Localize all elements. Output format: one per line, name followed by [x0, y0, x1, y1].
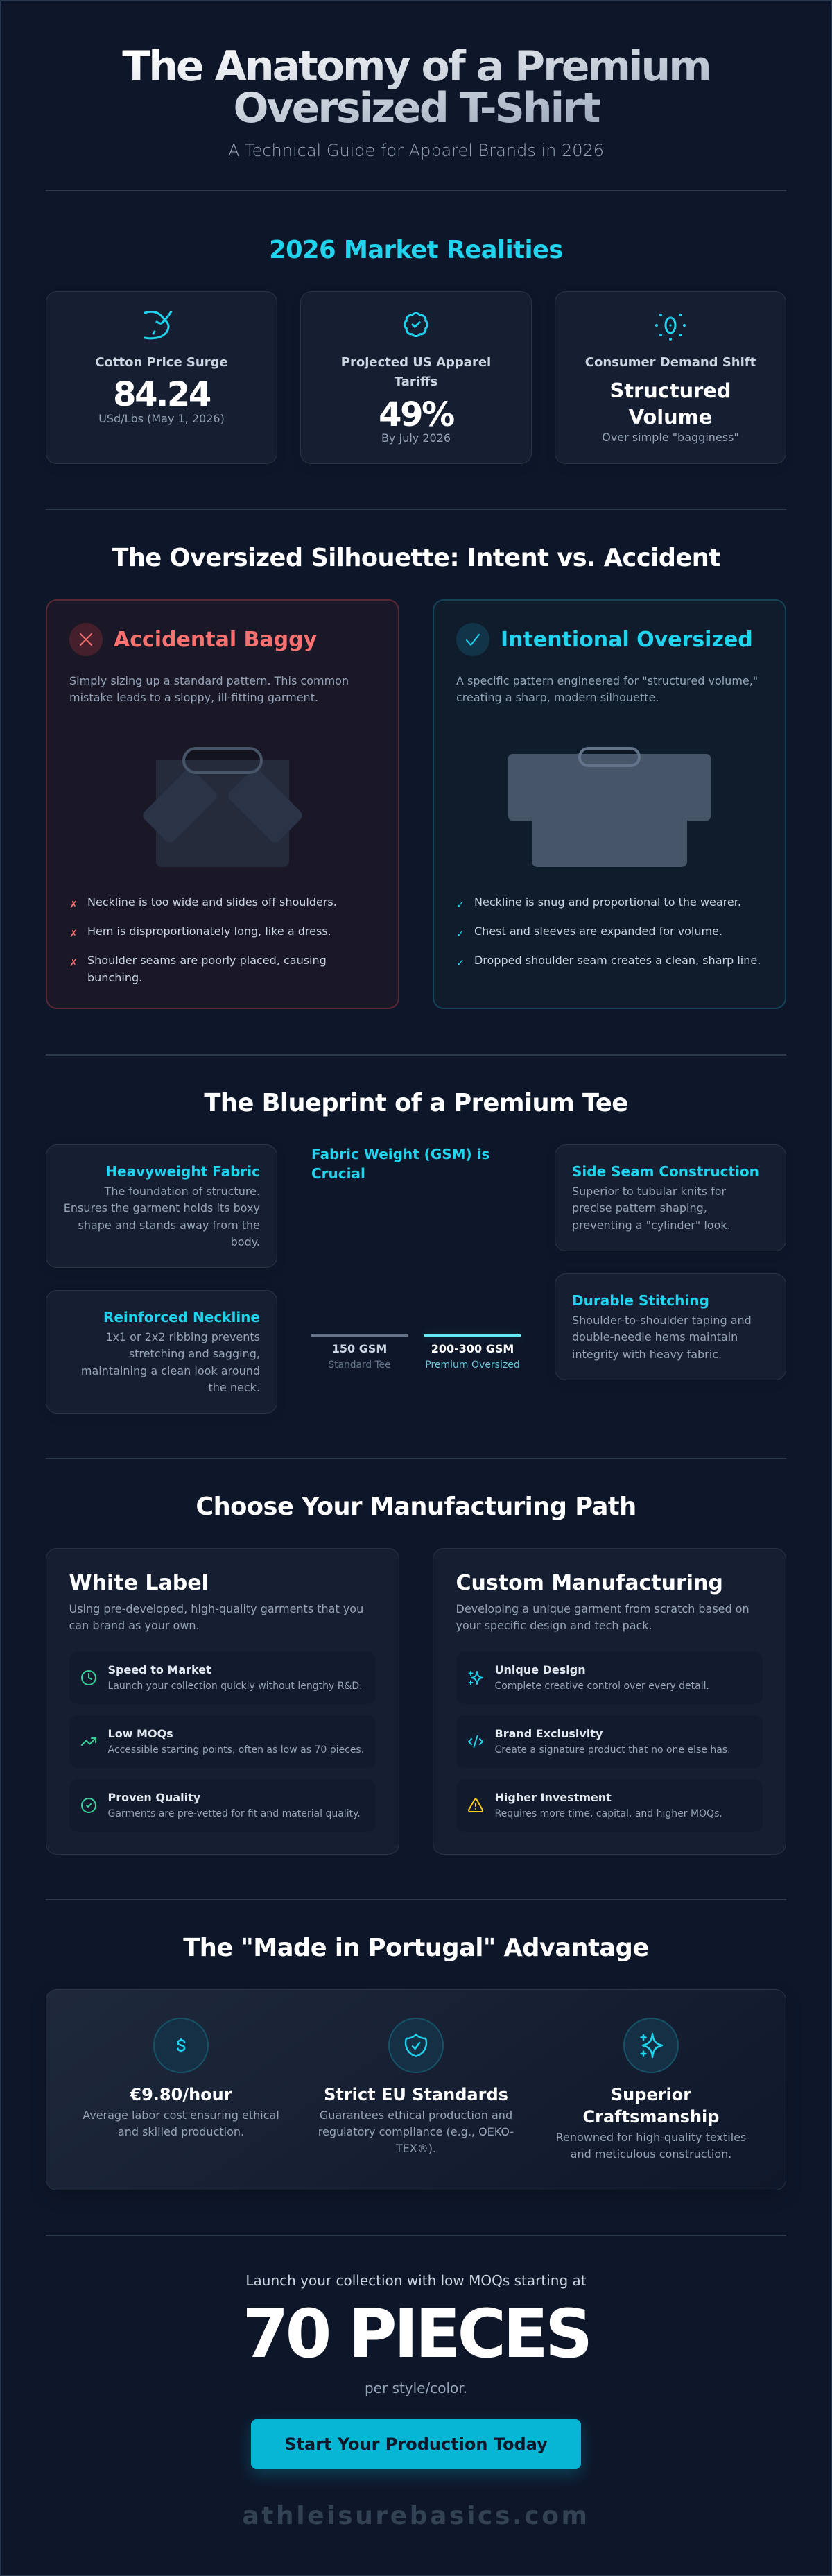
panel: intentional oversized: [433, 599, 786, 1009]
label: Tariffs: [395, 375, 437, 388]
item: speed to market: [69, 1651, 376, 1704]
section: blueprint: [46, 1089, 786, 1414]
bar: 150 gsm: Standard Tee: [328, 1359, 391, 1371]
item: low moqs: [69, 1715, 376, 1768]
icon: x: [69, 623, 103, 656]
panel description: Developing a unique garment from scratch based on: [456, 1602, 749, 1615]
panel title: White Label: [69, 1571, 209, 1595]
item text: Complete creative control over every detail.: [495, 1681, 709, 1692]
panel title: Accidental Baggy: [114, 627, 317, 652]
bar: 150 gsm: 150 GSM: [332, 1342, 387, 1355]
card text: precise pattern shaping,: [572, 1201, 707, 1214]
illustration: oversized tee: [508, 747, 711, 867]
icon: warning triangle: [468, 1798, 483, 1812]
item text: regulatory compliance (e.g., OEKO-: [318, 2125, 514, 2138]
sublabel: Over simple "bagginess": [602, 431, 739, 444]
list item: ✓: [456, 958, 465, 969]
panel: advantages: [46, 1989, 786, 2190]
card title: Side Seam Construction: [572, 1163, 759, 1180]
icon: check circle: [81, 1798, 96, 1813]
card title: Heavyweight Fabric: [105, 1163, 260, 1180]
list item: ✗: [69, 929, 78, 940]
item text: Garments are pre-vetted for fit and material quality.: [108, 1808, 361, 1819]
card: side seam: [555, 1144, 786, 1251]
value: Volume: [629, 405, 712, 429]
item title: Brand Exclusivity: [495, 1727, 603, 1740]
item title: Strict EU Standards: [324, 2085, 508, 2104]
list item text: [87, 954, 327, 984]
item text: and meticulous construction.: [571, 2147, 731, 2161]
icon: sparkles: [623, 2018, 679, 2073]
label: Consumer Demand Shift: [585, 355, 756, 369]
panel description: Using pre-developed, high-quality garments that you: [69, 1602, 363, 1615]
panel description: your specific design and tech pack.: [456, 1619, 652, 1632]
description: creating a sharp, modern silhouette.: [456, 691, 659, 704]
heading: The Blueprint of a Premium Tee: [204, 1089, 628, 1117]
button: [251, 2419, 581, 2469]
card text: shape and stands away from the: [78, 1219, 260, 1232]
item text: Create a signature product that no one else has.: [495, 1744, 731, 1755]
icon: cotton: [144, 311, 173, 340]
lead text: Launch your collection with low MOQs starting at: [245, 2272, 587, 2289]
website footer: athleisurebasics.com: [242, 2502, 590, 2530]
card text: maintaining a clean look around: [81, 1364, 260, 1377]
card text: The foundation of structure.: [105, 1185, 260, 1198]
card text: stretching and sagging,: [129, 1347, 260, 1360]
list item text: Chest and sleeves are expanded for volume.: [474, 925, 722, 938]
chart: fabric weight: [311, 1146, 521, 1371]
list item: ✓: [456, 929, 465, 940]
chart title: Crucial: [311, 1165, 365, 1182]
heading: The "Made in Portugal" Advantage: [183, 1934, 649, 1962]
bar: 200-300 gsm: Premium Oversized: [425, 1359, 520, 1371]
value: 49%: [379, 395, 453, 434]
panel title: Intentional Oversized: [501, 627, 753, 652]
panel: custom manufacturing: [433, 1548, 786, 1855]
item title: Higher Investment: [495, 1791, 612, 1804]
chart title: [311, 1146, 489, 1182]
card text: Ensures the garment holds its boxy: [64, 1201, 260, 1214]
card: tariffs: [300, 291, 532, 464]
card: reinforced neckline: [46, 1290, 277, 1414]
card text: [572, 1185, 731, 1232]
label: Cotton Price Surge: [95, 355, 228, 369]
card text: the neck.: [209, 1381, 260, 1394]
card text: [64, 1185, 260, 1248]
icon: shield: [388, 2018, 444, 2073]
icon: clock: [81, 1670, 96, 1685]
heading: The Oversized Silhouette: Intent vs. Accident: [112, 544, 720, 572]
title: [0, 46, 832, 129]
panel: white label: [46, 1548, 399, 1855]
description: Simply sizing up a standard pattern. This common: [69, 674, 349, 687]
list item text: Neckline is snug and proportional to the wearer.: [474, 895, 741, 909]
description: [69, 674, 349, 704]
item: higher investment: [456, 1779, 763, 1832]
item: unique design: [456, 1651, 763, 1704]
icon: radiant eye: [655, 314, 686, 341]
card: durable stitching: [555, 1273, 786, 1380]
item title: Unique Design: [495, 1663, 586, 1676]
description: mistake leads to a sloppy, ill-fitting garment.: [69, 691, 318, 704]
card text: Shoulder-to-shoulder taping and: [572, 1314, 752, 1327]
item title: €9.80/hour: [130, 2085, 232, 2104]
list item text: Neckline is too wide and slides off shoulders.: [87, 895, 337, 909]
title: Oversized T-Shirt: [234, 84, 598, 132]
illustration: baggy tee: [143, 747, 302, 867]
label: Projected US Apparel: [341, 355, 491, 369]
item text: and skilled production.: [118, 2125, 244, 2138]
header: [122, 42, 710, 160]
card text: preventing a "cylinder" look.: [572, 1219, 731, 1232]
item text: Requires more time, capital, and higher MOQs.: [495, 1808, 722, 1819]
card text: double-needle hems maintain: [572, 1330, 738, 1343]
bar: 200-300 gsm: [424, 1334, 521, 1371]
value: Structured: [610, 379, 731, 402]
bar: 200-300 gsm: 200-300 GSM: [431, 1342, 514, 1355]
card title: Durable Stitching: [572, 1292, 709, 1309]
bar: 150 gsm: [311, 1334, 408, 1371]
card: consumer demand: [555, 291, 786, 464]
item text: [556, 2131, 746, 2161]
heading: 2026 Market Realities: [269, 236, 563, 264]
item text: [83, 2109, 279, 2138]
item title: Superior: [611, 2085, 691, 2104]
card text: [81, 1330, 260, 1394]
card: cotton price surge: [46, 291, 277, 464]
label: [341, 355, 491, 388]
value: [610, 379, 731, 429]
sublabel: By July 2026: [381, 431, 451, 445]
item text: Renowned for high-quality textiles: [556, 2131, 746, 2144]
item text: Accessible starting points, often as low as 70 pieces.: [108, 1744, 364, 1755]
item title: Speed to Market: [108, 1663, 211, 1676]
item title: Low MOQs: [108, 1727, 173, 1740]
panel description: can brand as your own.: [69, 1619, 200, 1632]
icon: check: [456, 623, 489, 656]
card: heavyweight fabric: [46, 1144, 277, 1268]
icon: code: [468, 1735, 483, 1748]
icon: sparkles: [469, 1671, 483, 1685]
card title: Reinforced Neckline: [103, 1309, 260, 1325]
heading: Choose Your Manufacturing Path: [196, 1493, 636, 1521]
item: brand exclusivity: [456, 1715, 763, 1768]
section: silhouette: [46, 544, 786, 1009]
item text: Average labor cost ensuring ethical: [83, 2109, 279, 2122]
button: Start Your Production Today: [284, 2435, 548, 2454]
per style text: per style/color.: [365, 2380, 467, 2396]
icon: dollar: [153, 2018, 209, 2073]
title: The Anatomy of a Premium: [122, 42, 710, 91]
item text: Guarantees ethical production and: [320, 2109, 512, 2122]
card text: [572, 1314, 752, 1361]
sublabel: USd/Lbs (May 1, 2026): [98, 412, 225, 425]
list item text: bunching.: [87, 971, 142, 984]
value: 84.24: [113, 375, 210, 414]
list item text: Dropped shoulder seam creates a clean, sharp line.: [474, 954, 761, 967]
list item text: Shoulder seams are poorly placed, causing: [87, 954, 327, 967]
section: manufacturing path: [46, 1493, 786, 1855]
subtitle: A Technical Guide for Apparel Brands in 2026: [228, 141, 604, 160]
section: call to action: [242, 2272, 590, 2530]
panel description: [69, 1602, 363, 1632]
card text: body.: [231, 1235, 260, 1248]
card text: Superior to tubular knits for: [572, 1185, 726, 1198]
list item: ✓: [456, 900, 465, 911]
section: 2026 market realities: [46, 236, 786, 464]
panel: accidental baggy: [46, 599, 399, 1009]
icon: trending up: [81, 1737, 96, 1746]
icon: badge check: [404, 312, 428, 337]
item text: TEX®).: [396, 2142, 436, 2155]
panel title: Custom Manufacturing: [456, 1571, 723, 1595]
item text: [318, 2109, 514, 2155]
section: made in portugal: [46, 1934, 786, 2190]
list item: ✗: [69, 958, 78, 969]
panel description: [456, 1602, 749, 1632]
item text: Launch your collection quickly without lengthy R&D.: [108, 1681, 363, 1692]
list item: ✗: [69, 900, 78, 911]
item title: Proven Quality: [108, 1791, 200, 1804]
big number: 70 PIECES: [243, 2295, 589, 2373]
card text: integrity with heavy fabric.: [572, 1348, 722, 1361]
item title: Craftsmanship: [583, 2107, 719, 2127]
description: A specific pattern engineered for "structured volume,": [456, 674, 758, 687]
item: proven quality: [69, 1779, 376, 1832]
chart title: Fabric Weight (GSM) is: [311, 1146, 489, 1162]
description: [456, 674, 758, 704]
item title: [583, 2085, 719, 2127]
list item text: Hem is disproportionately long, like a dress.: [87, 925, 331, 938]
card text: 1x1 or 2x2 ribbing prevents: [105, 1330, 260, 1343]
